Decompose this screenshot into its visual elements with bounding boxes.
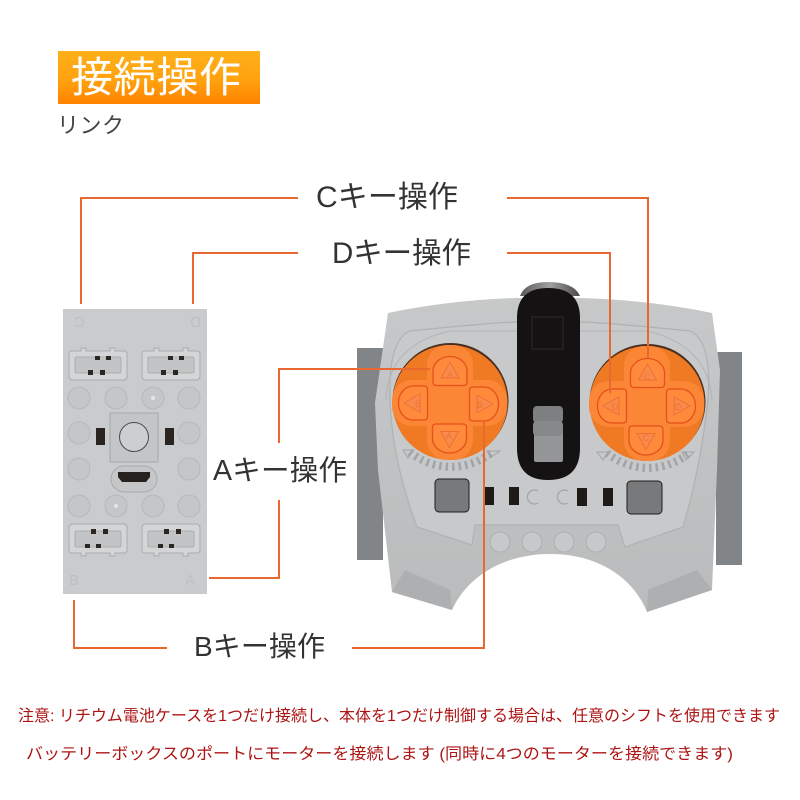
label: B key: Bキー操作 <box>194 631 325 662</box>
centre selector <box>517 282 580 480</box>
charging port <box>111 466 157 492</box>
switches <box>484 487 613 506</box>
left dial: B <box>477 400 483 410</box>
leader lines <box>74 198 648 648</box>
indicator slots <box>96 428 174 445</box>
receiver module <box>63 309 207 594</box>
port letters: D <box>190 313 201 330</box>
port letters <box>69 313 201 589</box>
label: A key: Aキー操作 <box>213 455 347 487</box>
remote body <box>375 298 720 612</box>
remote controller <box>357 282 742 612</box>
studs <box>68 387 200 517</box>
sensor window <box>110 413 158 462</box>
channel letters <box>527 490 568 504</box>
subtitle: リンク <box>57 113 124 138</box>
right dial: C <box>644 372 651 382</box>
port letters: A <box>185 572 195 589</box>
note line 1: 注意: リチウム電池ケースを1つだけ接続し、本体を1つだけ制御する場合は、任意のシフトを使用できます <box>18 707 780 725</box>
label: D key: Dキー操作 <box>332 237 471 270</box>
label: C key: Cキー操作 <box>316 181 458 214</box>
function buttons <box>435 479 662 514</box>
right dial: C <box>643 433 650 443</box>
right dial: D <box>612 402 619 412</box>
note line 2: バッテリーボックスのポートにモーターを接続します (同時に4つのモーターを接続できます) <box>26 745 733 763</box>
scale marks <box>403 450 694 468</box>
dial rings <box>386 331 712 400</box>
left dial: A <box>446 431 452 441</box>
corner facets <box>392 570 712 612</box>
inner face <box>390 322 709 547</box>
port letters: B <box>69 572 79 589</box>
side tabs <box>357 348 742 565</box>
left dial: B <box>415 399 421 409</box>
slider <box>533 406 563 462</box>
left dial <box>392 343 508 460</box>
port letters: C <box>74 313 85 330</box>
right dial: D <box>675 402 682 412</box>
left dial: A <box>447 370 453 380</box>
connectors <box>69 348 200 556</box>
right dial <box>589 344 706 461</box>
bottom studs <box>490 532 606 552</box>
title banner: 接続操作 <box>71 54 241 101</box>
